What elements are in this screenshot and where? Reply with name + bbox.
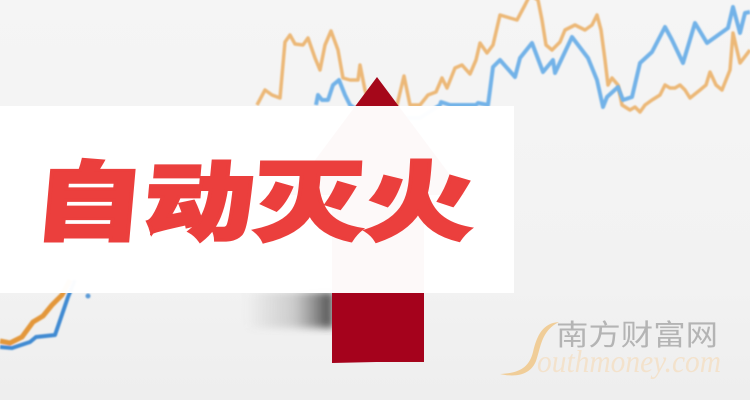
logo swoosh [500,322,559,375]
title: 火 [362,155,476,251]
logo chinese name: 南方财富网 [556,319,718,352]
red arrow [289,77,465,362]
white title banner [0,106,514,293]
line chart: blue series [316,7,750,118]
title: 动 [140,155,258,251]
shadow of arrow [245,292,333,328]
watermark logo [500,319,721,379]
title: 自 [30,155,148,251]
line chart: orange series [257,0,750,120]
logo url: outhmoney.com [537,343,721,379]
title: 灭 [252,155,366,251]
title [30,155,476,251]
solid arrow block below banner [332,293,424,363]
line chart: lower left segment [0,280,90,348]
